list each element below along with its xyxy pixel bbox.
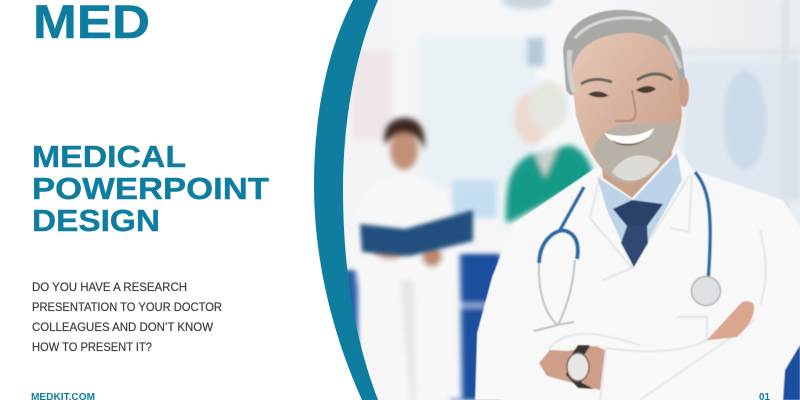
neck [600, 125, 672, 198]
background figure: nurse with folder [352, 118, 473, 400]
icon: chest piece [692, 276, 720, 306]
lab coat [475, 150, 800, 400]
hair back [563, 10, 686, 95]
main doctor [475, 10, 800, 400]
heading: DESIGN [32, 203, 160, 238]
stethoscope [534, 172, 720, 331]
hair highlights [575, 18, 652, 38]
photo: clinic background [340, 0, 800, 400]
shape: teal arc band [300, 0, 378, 400]
body text: DO YOU HAVE A RESEARCH [32, 282, 187, 294]
right hand [707, 301, 754, 340]
body text [32, 282, 222, 354]
body text: COLLEAGUES AND DON’T KNOW [32, 322, 213, 334]
ear [679, 77, 689, 107]
left forearm [539, 346, 605, 390]
background figure: colleague in teal scrubs [506, 81, 594, 222]
heading [32, 139, 269, 238]
beard [593, 118, 678, 183]
smile [604, 128, 654, 144]
watch [566, 345, 594, 389]
icon: blue folder [360, 210, 473, 256]
eyes [588, 86, 656, 97]
corner: blue furniture [783, 345, 800, 400]
heading: MEDICAL [32, 139, 186, 174]
nose shadow [615, 90, 636, 121]
shirt [597, 153, 682, 267]
background: blue waiting-room seat [345, 254, 500, 400]
eyebrows [581, 74, 672, 84]
body text: PRESENTATION TO YOUR DOCTOR [32, 302, 222, 314]
coat shading [548, 175, 766, 400]
panel: white text area [0, 0, 362, 400]
tie [613, 200, 663, 267]
body text: HOW TO PRESENT IT? [32, 342, 152, 354]
heading: POWERPOINT [32, 171, 269, 206]
head [572, 33, 682, 184]
